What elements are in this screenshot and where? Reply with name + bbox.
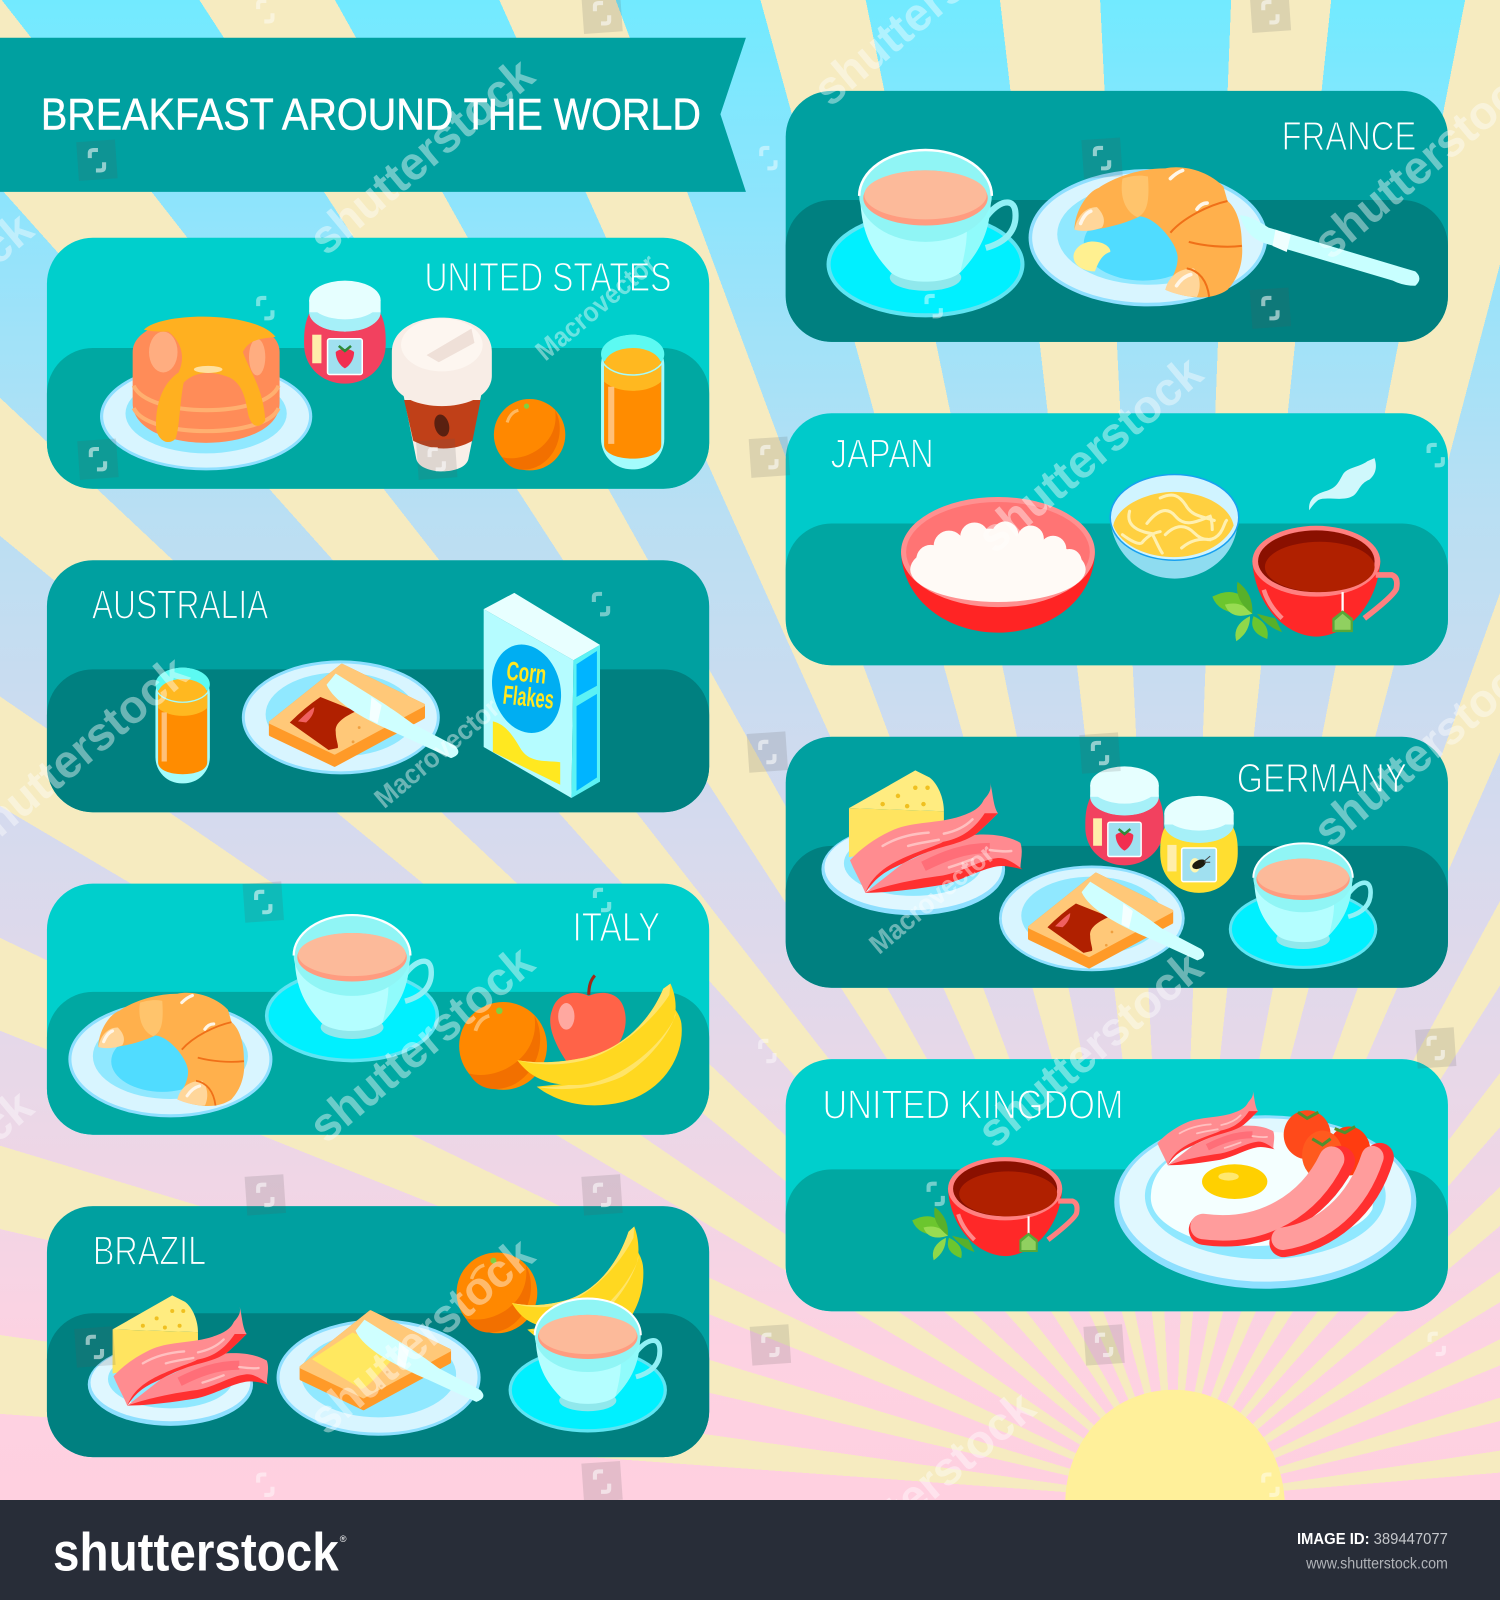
panel: United Kingdom (786, 1059, 1448, 1311)
watermark text: shutterstock (299, 935, 544, 1152)
icon: red tea cup (912, 1157, 1077, 1260)
icon: bananas (517, 984, 682, 1105)
panel: Germany (786, 737, 1448, 988)
panel: Japan (786, 413, 1448, 665)
sun (1065, 1390, 1285, 1500)
watermark text: shutterstock (967, 940, 1213, 1157)
icon: noodle bowl (1110, 474, 1239, 579)
panel: Australia (47, 560, 709, 812)
logo mark: registered: ® (340, 1534, 347, 1544)
icon: strawberry jam jar (304, 281, 386, 384)
icon: tea cup (1229, 843, 1377, 969)
label: Japan: JAPAN (831, 430, 934, 476)
text: corn flakes: Corn (505, 656, 548, 690)
icon: pancakes on plate (100, 317, 312, 470)
watermark text: shutterstock (800, 1380, 1045, 1597)
panel: France (786, 91, 1448, 342)
icon: cheese and ham on plate (88, 1295, 269, 1426)
icon: croissant and knife on plate (1029, 167, 1419, 306)
watermark text: shutterstock (967, 345, 1213, 563)
label: Australia: AUSTRALIA (92, 581, 269, 627)
panel: Italy (47, 884, 709, 1135)
label: United States: UNITED STATES (424, 254, 671, 300)
panel: United States (47, 238, 709, 489)
text: website: www.shutterstock.com (1305, 1555, 1448, 1572)
icon: jam toast on plate (999, 865, 1204, 971)
icon: orange (494, 399, 565, 470)
icon: red tea cup (1212, 526, 1397, 641)
icon: coffee to go (392, 318, 492, 471)
icon: cheese and ham on plate (821, 770, 1022, 915)
watermark text: shutterstock (299, 47, 544, 265)
title banner (0, 38, 746, 192)
icon: orange juice glass (601, 335, 664, 469)
panel: Brazil (47, 1206, 709, 1457)
logo: shutterstock: shutterstock (53, 1522, 340, 1582)
icon: banana (512, 1227, 643, 1348)
icon: tea cup (265, 915, 439, 1062)
title: BREAKFAST AROUND THE WORLD (41, 89, 701, 140)
label: Brazil: BRAZIL (93, 1227, 206, 1273)
icon: english breakfast plate (1114, 1090, 1416, 1289)
icon: tea cup (509, 1299, 667, 1432)
icon: croissant on plate (68, 993, 272, 1117)
icon: orange (457, 1252, 537, 1333)
label: France: FRANCE (1282, 113, 1416, 159)
icon: orange juice glass (155, 668, 210, 783)
icon: corn flakes box (482, 593, 600, 798)
icon: butter toast on plate (277, 1312, 483, 1436)
icon: steam (1309, 458, 1376, 510)
label: Italy: ITALY (572, 904, 660, 950)
icon: orange (459, 1002, 547, 1090)
watermark text: Macrovector (863, 838, 1000, 960)
label: United Kingdom: UNITED KINGDOM (822, 1081, 1123, 1127)
label: Germany: GERMANY (1237, 755, 1407, 801)
icon: jam toast on plate (242, 660, 458, 774)
icon: strawberry jam jar (1085, 766, 1164, 865)
icon: honey jar (1160, 796, 1238, 893)
text: image id: IMAGE ID: 389447077 (1297, 1531, 1448, 1548)
icon: rice bowl (901, 497, 1095, 633)
icon: tea cup (827, 150, 1024, 317)
watermark text: Macrovector (529, 247, 663, 366)
watermark text: Macrovector (368, 692, 506, 814)
footer bar (0, 1500, 1500, 1600)
icon: corn flakes box: Flakes (502, 680, 555, 715)
icon: apple (550, 976, 626, 1061)
watermark text: shutterstock (299, 1227, 544, 1444)
